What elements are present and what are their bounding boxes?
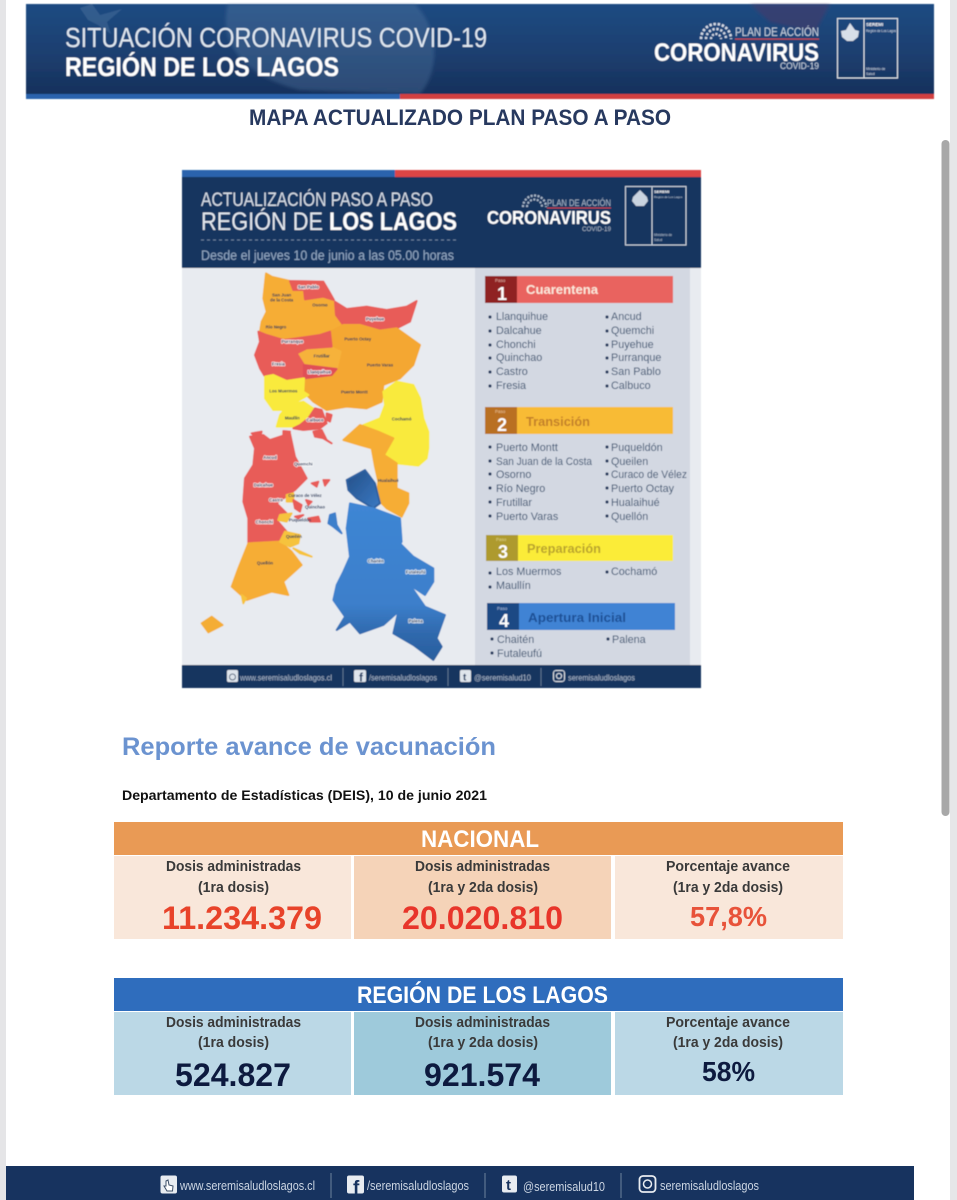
label Chonchi: Chonchi	[256, 519, 273, 524]
card value: 11.234.379	[162, 900, 322, 936]
island: Guafo	[202, 617, 223, 632]
step number: 1	[497, 284, 507, 304]
commune list	[488, 566, 657, 592]
box divider	[651, 186, 653, 245]
heading: vaccination report: Reporte avance de vacunación	[122, 733, 496, 761]
label Frutillar: Frutillar	[314, 353, 330, 358]
icon: tumblr	[460, 670, 471, 684]
bar	[485, 276, 673, 303]
logo covid: COVID-19	[582, 226, 611, 233]
map panel background	[182, 268, 701, 665]
inner dashed line	[201, 239, 457, 241]
right window edge	[950, 0, 957, 1200]
label Ancud: Ancud	[263, 455, 277, 460]
label Llanquihue: Llanquihue	[308, 370, 331, 375]
box text ministerio: Ministerio de	[866, 67, 885, 71]
label Osorno: Osorno	[312, 303, 328, 308]
commune list: Castro	[496, 366, 528, 378]
instagram handle: seremisaludloslagos	[568, 672, 635, 682]
commune group: north orange	[260, 273, 343, 340]
commune: Cochamo	[363, 382, 428, 466]
commune: Los Muermos	[265, 375, 308, 410]
commune list: Osorno	[496, 469, 531, 481]
map of Los Lagos communes	[202, 273, 445, 660]
footer separators	[331, 1173, 621, 1198]
instagram handle: seremisaludloslagos	[660, 1178, 759, 1193]
label Quellon: Quellón	[257, 561, 273, 566]
card: first dose	[114, 856, 351, 939]
commune list: Cochamó	[611, 566, 657, 578]
source line: Departamento de Estadísticas (DEIS), 10 de junio 2021	[122, 788, 488, 803]
commune list: Chaitén	[497, 634, 534, 646]
commune list: Llanquihue	[496, 311, 548, 323]
commune list: Puerto Montt	[496, 442, 558, 454]
islets yellow	[278, 493, 293, 522]
commune list: Futaleufú	[497, 648, 542, 660]
box outline	[838, 18, 898, 78]
commune: Frutillar	[297, 347, 341, 369]
commune list: Purranque	[611, 352, 661, 364]
main heading: MAPA ACTUALIZADO PLAN PASO A PASO	[249, 105, 671, 130]
panel: region de los lagos table	[114, 978, 843, 1095]
logo word: CORONAVIRUS	[654, 39, 819, 67]
step number: 3	[498, 542, 508, 562]
commune list: Quemchi	[611, 325, 654, 337]
commune labels	[254, 285, 426, 624]
step badge	[485, 276, 517, 303]
bar	[486, 535, 673, 561]
footer bar	[182, 665, 701, 688]
web address: www.seremisaludloslagos.cl	[239, 672, 332, 682]
commune list: Palena	[612, 634, 646, 646]
banner title line 1: SITUACIÓN CORONAVIRUS COVID-19	[65, 22, 487, 53]
inner logo	[487, 196, 611, 233]
islets red	[293, 480, 329, 522]
legend column	[475, 268, 690, 665]
inner footer	[182, 665, 701, 688]
paso word: Paso	[495, 278, 506, 283]
table title: NACIONAL	[421, 826, 539, 853]
commune group: Chiloe north	[243, 433, 307, 543]
banner flag red	[750, 4, 830, 32]
label Puqueldon: Puqueldón	[289, 518, 312, 523]
icon: instagram	[640, 1176, 656, 1192]
label Hualaihue: Hualaihué	[378, 478, 399, 483]
commune list: Calbuco	[611, 380, 651, 392]
legend: paso 4 apertura inicial	[487, 603, 675, 660]
box text region: Región de Los Lagos	[866, 29, 897, 33]
legend: paso 1 cuarentena	[485, 276, 673, 392]
label Castro: Castro	[269, 497, 283, 502]
commune list	[490, 634, 646, 660]
card label 2: (1ra y 2da dosis)	[673, 879, 783, 896]
card label 2: (1ra dosis)	[198, 879, 269, 896]
logo caption: PLAN DE ACCIÓN	[735, 24, 819, 39]
commune list: Maullín	[496, 580, 531, 592]
label Calbuco: Calbuco	[306, 417, 324, 422]
card label 2: (1ra y 2da dosis)	[428, 879, 538, 896]
commune list: Dalcahue	[496, 325, 542, 337]
card label 1: Porcentaje avance	[666, 1014, 790, 1031]
label Quemchi: Quemchi	[294, 462, 313, 467]
commune list: Hualaihué	[611, 497, 660, 509]
icon: virus dots	[523, 196, 546, 207]
step name: Preparación	[527, 541, 601, 556]
inner seremi box	[626, 186, 686, 245]
commune list: Quinchao	[496, 352, 542, 364]
banner flag star	[80, 4, 122, 34]
label Chaiten: Chaitén	[368, 558, 384, 563]
card label 1: Dosis administradas	[166, 858, 301, 875]
label Puerto Montt: Puerto Montt	[341, 390, 368, 395]
paso word: Paso	[495, 409, 506, 414]
label Puyehue: Puyehue	[366, 316, 385, 321]
card label 2: (1ra dosis)	[198, 1034, 269, 1051]
card: percentage	[615, 856, 843, 939]
label Palena: Palena	[409, 619, 423, 624]
step badge	[487, 603, 519, 630]
table header	[114, 822, 843, 855]
commune: Maullin	[277, 402, 313, 427]
label Quinchao: Quinchao	[305, 505, 325, 510]
commune: Chaiten	[333, 503, 402, 633]
commune list: Fresia	[496, 380, 526, 392]
icon: facebook	[354, 670, 366, 684]
icon: web	[160, 1176, 177, 1194]
card background	[114, 1012, 351, 1095]
icon: facebook: f	[353, 1178, 360, 1199]
card label 2: (1ra y 2da dosis)	[673, 1034, 783, 1051]
card label 2: (1ra y 2da dosis)	[428, 1034, 538, 1051]
card: both doses	[354, 856, 611, 939]
left window edge	[0, 0, 6, 1200]
label Purranque: Purranque	[282, 339, 304, 344]
card background	[615, 1012, 843, 1095]
commune list	[488, 311, 661, 392]
commune: Chaiten north	[347, 470, 380, 508]
step number: 4	[499, 611, 509, 631]
logo covid: COVID-19	[780, 61, 819, 71]
logo: plan de accion coronavirus	[654, 24, 819, 71]
label San Juan: San Juan	[272, 292, 292, 297]
icon: tumblr: t	[463, 672, 467, 684]
logo: seremi box	[838, 18, 898, 78]
card label 1: Porcentaje avance	[666, 858, 790, 875]
commune: Queilen	[242, 532, 312, 603]
box text salud: Salud	[654, 238, 662, 242]
commune group: Puyehue	[335, 301, 417, 331]
label Fresia: Fresia	[272, 362, 285, 367]
step name: Apertura Inicial	[528, 610, 626, 625]
panel: nacional table	[114, 822, 843, 939]
icon: crest	[632, 190, 648, 206]
commune group: San Pablo	[290, 281, 334, 300]
card value: 58%	[702, 1056, 755, 1087]
commune: Llanquihue	[304, 365, 337, 378]
commune list: Los Muermos	[496, 566, 562, 578]
commune list: Ancud	[611, 311, 642, 323]
card background	[354, 1012, 611, 1095]
box text seremi: SEREMI	[654, 189, 669, 194]
card: first dose	[114, 1012, 351, 1095]
label Cochamo: Cochamó	[392, 417, 412, 422]
tumblr handle: @seremisalud10	[474, 672, 531, 682]
card background	[615, 856, 843, 939]
label Dalcahue: Dalcahue	[254, 482, 274, 487]
label Puerto Octay: Puerto Octay	[344, 336, 372, 341]
top strip red	[395, 170, 701, 177]
commune list: Chonchi	[496, 339, 536, 351]
label Queilen: Queilén	[286, 534, 302, 539]
footer bar	[6, 1166, 914, 1200]
commune list: Frutillar	[496, 497, 532, 509]
label Futaleufu: Futaleufú	[406, 569, 426, 574]
card background	[114, 856, 351, 939]
commune list: Quellón	[611, 511, 648, 523]
card background	[354, 856, 611, 939]
commune group: Purranque and Fresia	[255, 332, 332, 381]
banner bottom bar red	[400, 94, 934, 99]
step name: Cuarentena	[526, 282, 599, 297]
box text region: Región de Los Lagos	[654, 195, 683, 199]
label Los Muermos: Los Muermos	[269, 388, 298, 393]
footer separators	[343, 668, 541, 686]
card value: 524.827	[175, 1057, 291, 1093]
icon: tumblr: t	[506, 1177, 511, 1194]
web address: www.seremisaludloslagos.cl	[179, 1178, 315, 1193]
paso word: Paso	[497, 606, 508, 611]
box text ministerio: Ministerio de	[654, 233, 672, 237]
paso word: Paso	[496, 537, 507, 542]
inner title line 2: REGIÓN DE LOS LAGOS	[201, 207, 457, 236]
inner date: Desde el jueves 10 de junio a las 05.00 horas	[201, 248, 454, 263]
card label 1: Dosis administradas	[166, 1014, 301, 1031]
commune: Quellon	[232, 542, 302, 600]
icon: facebook: f	[359, 670, 364, 684]
card label 1: Dosis administradas	[415, 858, 550, 875]
tumblr handle: @seremisalud10	[523, 1179, 605, 1194]
commune list: Puyehue	[611, 339, 654, 351]
icon: crest	[841, 23, 859, 41]
commune group: Puerto Octay, Varas, Montt	[303, 325, 420, 410]
step number: 2	[497, 415, 507, 435]
icon: instagram	[554, 670, 564, 682]
legend: paso 3 preparacion	[486, 535, 673, 592]
calbuco islets	[252, 413, 332, 443]
box outline	[626, 186, 686, 245]
step badge	[485, 407, 517, 434]
commune list: Puerto Octay	[611, 483, 675, 495]
card: both doses	[354, 1012, 611, 1095]
commune: Palena	[390, 585, 445, 660]
commune list: Queilen	[611, 456, 648, 468]
commune list: San Juan de la Costa	[496, 456, 592, 468]
logo word: CORONAVIRUS	[487, 208, 611, 228]
label Maullin: Maullín	[285, 416, 300, 421]
commune list: San Pablo	[611, 366, 661, 378]
bar	[487, 603, 675, 630]
chaiten islands	[328, 513, 342, 533]
commune list: Puerto Varas	[496, 511, 559, 523]
commune: Calbuco	[293, 408, 327, 430]
commune: Hualaihue	[343, 425, 408, 517]
page footer	[6, 1166, 914, 1200]
box divider	[863, 18, 865, 78]
commune list: Puqueldón	[611, 442, 663, 454]
inner title line 1: ACTUALIZACIÓN PASO A PASO	[201, 189, 433, 211]
label San Pablo: San Pablo	[298, 285, 319, 290]
icon: virus dots	[701, 24, 731, 39]
step badge	[486, 535, 518, 561]
top strip blue	[182, 170, 395, 177]
table title: REGIÓN DE LOS LAGOS	[357, 981, 608, 1009]
inner header	[182, 177, 701, 268]
table header	[114, 978, 843, 1011]
box text salud: Salud	[866, 72, 875, 76]
header banner	[26, 4, 934, 99]
card value: 57,8%	[690, 901, 767, 932]
box text seremi: SEREMI	[866, 22, 883, 27]
bar	[485, 407, 673, 434]
logo underline	[735, 38, 819, 40]
icon: facebook	[347, 1176, 364, 1199]
panel: regional map image	[182, 170, 701, 688]
commune list	[488, 442, 687, 523]
card value: 921.574	[424, 1057, 540, 1093]
banner title line 2: REGIÓN DE LOS LAGOS	[65, 51, 339, 82]
step name: Transición	[526, 414, 590, 429]
card: percentage	[615, 1012, 843, 1095]
logo underline	[547, 208, 611, 209]
card label 1: Dosis administradas	[415, 1014, 550, 1031]
logo caption: PLAN DE ACCIÓN	[547, 198, 611, 209]
facebook handle: /seremisaludloslagos	[369, 672, 437, 682]
label Curaco de Velez: Curaco de Vélez	[288, 493, 322, 498]
label Rio Negro: Río Negro	[266, 324, 287, 329]
label Puerto Varas: Puerto Varas	[367, 363, 394, 368]
card value: 20.020.810	[402, 900, 563, 936]
banner background	[26, 4, 934, 94]
commune list: Curaco de Vélez	[611, 469, 687, 481]
icon: tumblr	[502, 1176, 517, 1194]
banner bottom bar blue	[26, 94, 400, 99]
commune: Futaleufu	[395, 542, 433, 595]
commune list: Río Negro	[496, 483, 545, 495]
label de la Costa: de la Costa	[270, 297, 294, 302]
icon: web	[227, 670, 238, 682]
scrollbar thumb	[942, 140, 950, 816]
banner mask photo	[226, 4, 434, 94]
facebook handle: /seremisaludloslagos	[367, 1178, 469, 1193]
legend: paso 2 transicion	[485, 407, 687, 523]
